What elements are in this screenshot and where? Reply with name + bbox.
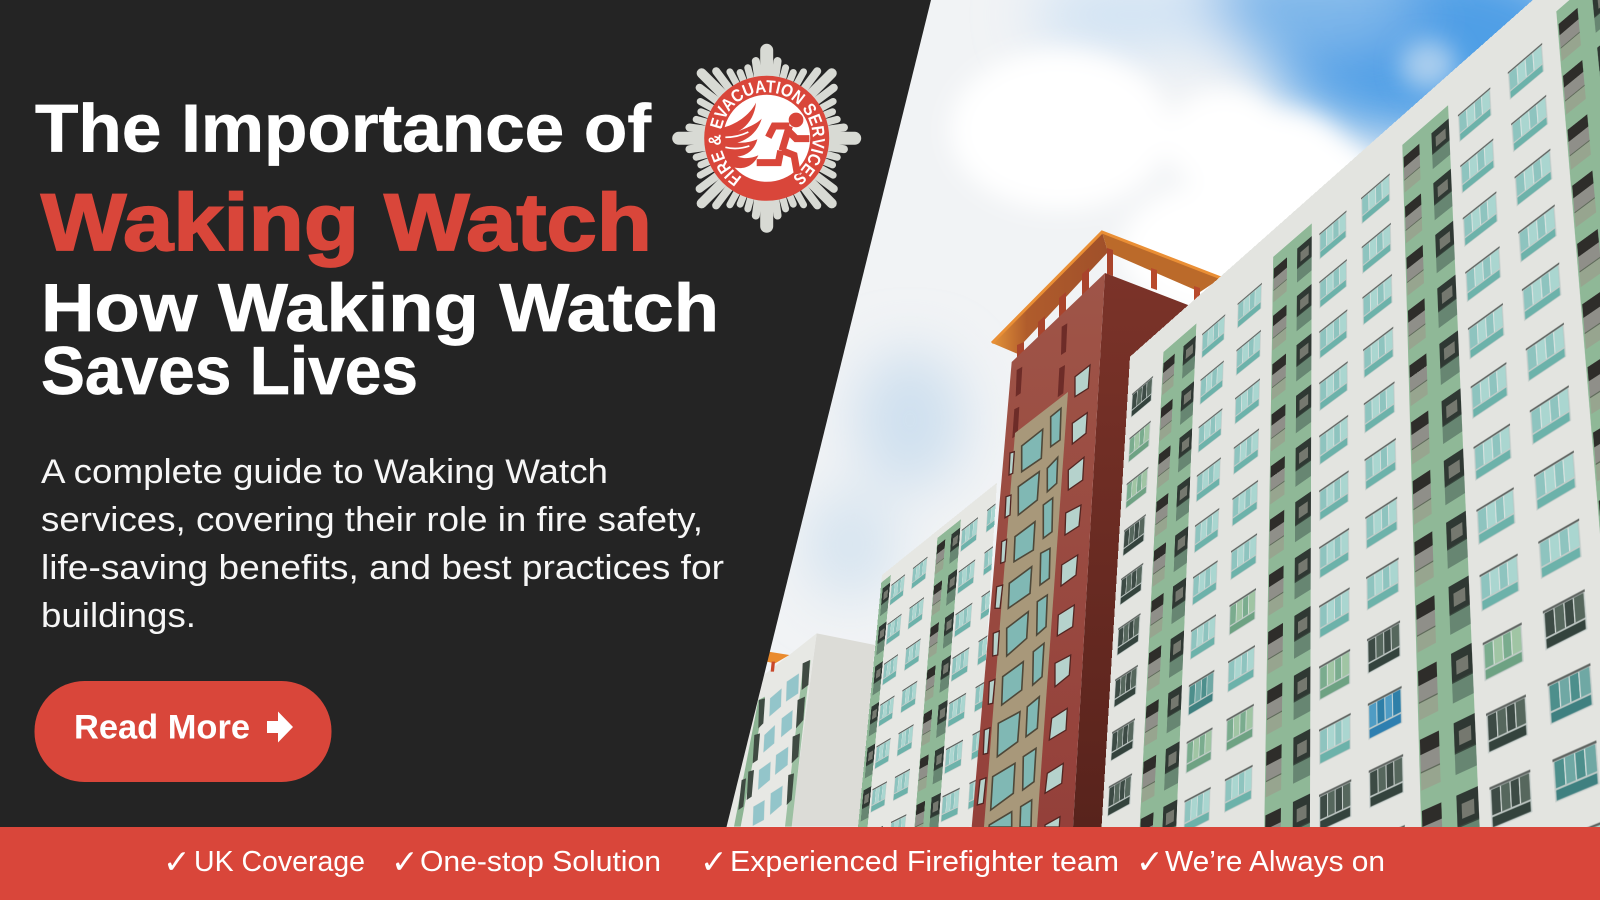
footer feature list: ✓: [391, 842, 419, 881]
footer feature list: ✓: [163, 842, 191, 881]
badge ring text: FIRE & EVACUATION SERVICES: [708, 80, 825, 186]
footer feature list: We’re Always on: [1165, 846, 1385, 878]
title: [35, 90, 719, 409]
description text: A complete guide to Waking Watch: [41, 453, 608, 491]
tower vents: [1012, 323, 1067, 438]
icon: small orange roof: [767, 652, 789, 672]
tower lit front face: [972, 273, 1105, 827]
badge star rays: [679, 50, 855, 226]
description text: life-saving benefits, and best practices for: [41, 549, 724, 587]
footer band: [0, 826, 1600, 900]
title line 1: The Importance of: [35, 90, 651, 166]
footer feature list: ✓: [1136, 842, 1164, 881]
button: Read More: [34, 681, 332, 782]
description text: services, covering their role in fire safety,: [41, 501, 703, 539]
dark diagonal panel: [0, 0, 931, 827]
button: Read More: Read More: [74, 708, 250, 746]
icon: flames and running figure: [721, 103, 809, 174]
tower dark side face: [1073, 273, 1188, 827]
badge red ring: [704, 76, 829, 201]
badge white centre: [723, 95, 810, 182]
logo: Fire & Evacuation Services badge: [672, 44, 862, 233]
title line 4: Saves Lives: [41, 333, 418, 409]
left apartment block facade: [853, 483, 997, 879]
icon: arrow: [267, 712, 293, 742]
footer feature list: Experienced Firefighter team: [730, 846, 1119, 878]
tower large and small windows: [989, 408, 1061, 827]
tower roof underside: [992, 232, 1221, 360]
footer feature list: [163, 842, 1385, 881]
footer feature list: ✓: [700, 842, 728, 881]
tower side windows: [977, 365, 1090, 827]
title line 2: Waking Watch: Waking Watch: [41, 178, 652, 268]
description text: buildings.: [41, 597, 196, 635]
tower tan window frame: [984, 392, 1068, 827]
description text: [41, 453, 724, 635]
title line 3: How Waking Watch: [41, 270, 719, 346]
footer feature list: UK Coverage: [194, 846, 365, 878]
footer feature list: One-stop Solution: [420, 846, 661, 878]
far-left building: [720, 633, 875, 827]
